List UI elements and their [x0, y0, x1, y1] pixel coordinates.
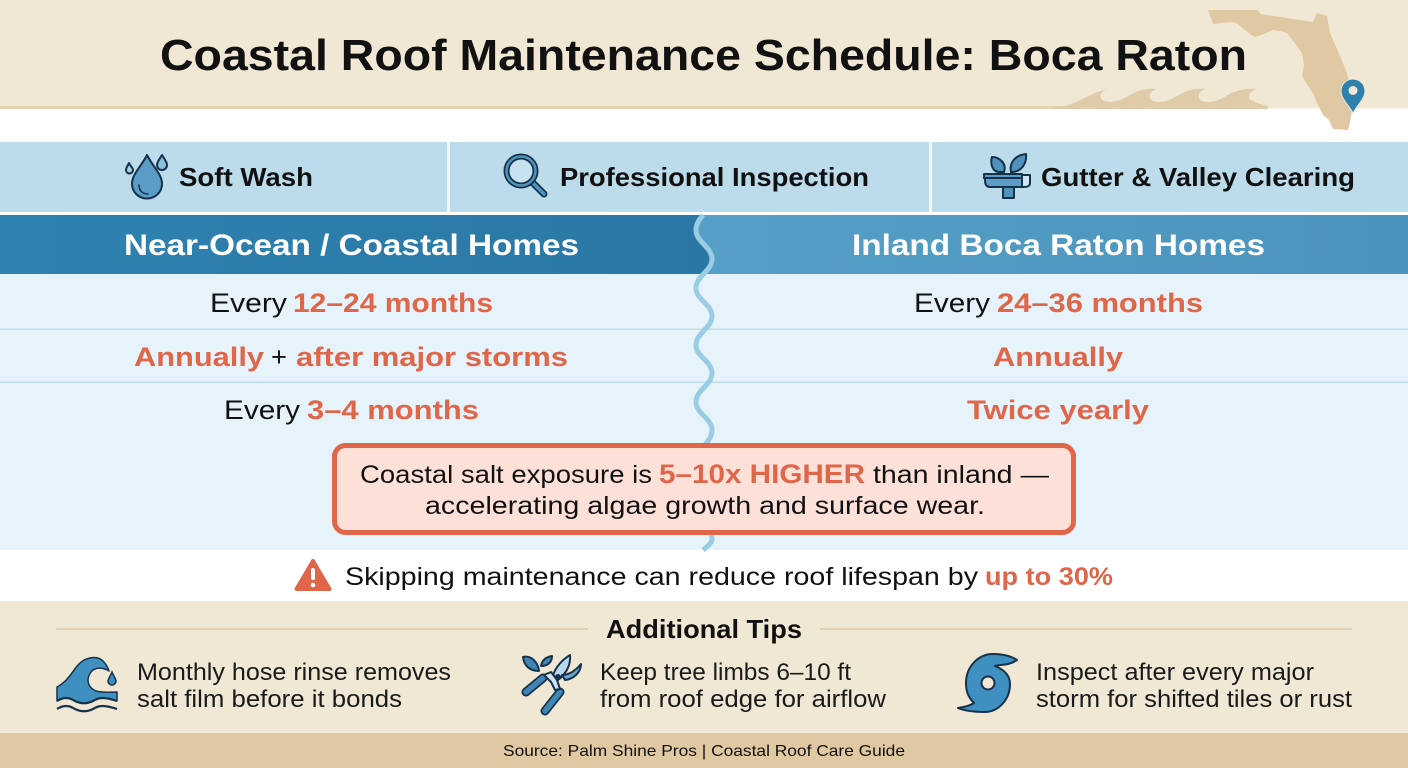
row: soft wash frequencies: Every [210, 288, 288, 318]
row: inspection frequencies: + [271, 342, 287, 372]
warning line [296, 561, 1113, 591]
icon: ocean wave [57, 658, 117, 711]
decorative waves [1052, 89, 1268, 109]
wavy divider [696, 215, 712, 550]
row: gutter clearing frequencies [224, 395, 1149, 425]
tab label: Soft Wash: Soft Wash [179, 162, 313, 192]
tip: storm inspection [1036, 659, 1352, 713]
tip: tree limbs: from roof edge for airflow [600, 686, 887, 713]
tip: storm inspection: storm for shifted tiles or rust [1036, 686, 1352, 713]
row: inspection frequencies: Annually [134, 342, 264, 372]
task tabs row [0, 142, 1408, 212]
row: soft wash frequencies: Every [914, 288, 991, 318]
warning line: up to 30% [985, 563, 1113, 591]
heading: additional tips: Additional Tips [606, 614, 802, 644]
header banner [0, 0, 1408, 130]
column header: coastal: Near-Ocean / Coastal Homes [124, 229, 579, 262]
row: soft wash frequencies: 12–24 months [293, 288, 493, 318]
callout: salt exposure: accelerating algae growth and surface wear. [425, 492, 985, 520]
icon: water drops [126, 155, 167, 198]
tip: hose rinse [137, 659, 451, 713]
row: inspection frequencies: Annually [993, 342, 1123, 372]
column header: inland [696, 215, 1408, 274]
icon: gutter with leaves [984, 154, 1030, 198]
icon: location pin [1341, 79, 1365, 113]
tab label: Gutter and Valley Clearing: Gutter & Valley Clearing [1041, 162, 1355, 192]
callout: salt exposure: Coastal salt exposure is [360, 461, 652, 489]
tab label: Professional Inspection: Professional Inspection [560, 162, 869, 192]
row: inspection frequencies: after major storms [296, 342, 568, 372]
warning line: Skipping maintenance can reduce roof lifespan by [345, 563, 979, 591]
footer source bar [0, 733, 1408, 768]
icon: hurricane [958, 654, 1017, 712]
icon: pruning shears [523, 655, 581, 711]
tip: storm inspection: Inspect after every major [1036, 659, 1314, 686]
icon: Florida map [1208, 10, 1352, 130]
callout: salt exposure: than inland — [873, 461, 1049, 489]
row: gutter clearing frequencies: Twice yearly [967, 395, 1149, 425]
row: gutter clearing frequencies: 3–4 months [307, 395, 479, 425]
footer source bar: Source: Palm Shine Pros | Coastal Roof Care Guide [503, 743, 905, 760]
callout: salt exposure [334, 446, 1074, 532]
row: soft wash frequencies [210, 288, 1203, 318]
tip: hose rinse: salt film before it bonds [137, 686, 402, 713]
icon: magnifying glass [506, 156, 544, 194]
row: inspection frequencies [134, 342, 1123, 372]
tip: tree limbs: Keep tree limbs 6–10 ft [600, 659, 851, 686]
column header: inland: Inland Boca Raton Homes [852, 229, 1265, 262]
title: Coastal Roof Maintenance Schedule: Boca Raton [160, 31, 1247, 80]
column header: coastal [0, 215, 712, 274]
tip: tree limbs [600, 659, 887, 713]
callout: salt exposure: 5–10x HIGHER [659, 459, 865, 489]
comparison table [0, 215, 1408, 550]
icon: warning triangle [296, 561, 330, 589]
additional tips panel [0, 601, 1408, 733]
tip: hose rinse: Monthly hose rinse removes [137, 659, 451, 686]
row: soft wash frequencies: 24–36 months [997, 288, 1203, 318]
row: gutter clearing frequencies: Every [224, 395, 301, 425]
